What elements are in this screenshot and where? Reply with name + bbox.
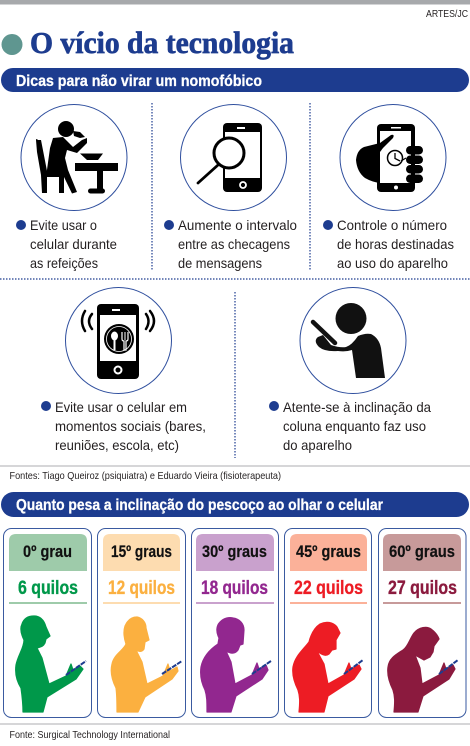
panel: 30 degrees: 18 quilos	[201, 577, 268, 599]
panel: tip interval	[164, 104, 297, 271]
text: coluna enquanto faz uso	[283, 418, 426, 434]
text	[178, 217, 297, 271]
icon: ringing phone with cutlery	[66, 288, 172, 394]
heading bar: tips: Dicas para não virar um nomofóbico	[16, 73, 262, 90]
text: Aumente o intervalo	[178, 217, 297, 233]
icon: hand holding phone with clock	[340, 104, 446, 210]
bullet	[164, 220, 174, 230]
panel: 45 degrees: 45º graus	[296, 543, 361, 561]
panel: 45 degrees: 22 quilos	[294, 577, 363, 599]
panel: 60 degrees: 27 quilos	[388, 577, 457, 599]
heading bar: neck weight: Quanto pesa a inclinação do pescoço ao olhar o celular	[16, 497, 383, 514]
figure: 45 degree tilt	[293, 622, 363, 712]
text: celular durante	[30, 236, 117, 252]
icon: magnifier on phone	[180, 104, 286, 210]
bullet	[41, 401, 51, 411]
text: Controle o número	[337, 217, 447, 233]
text: entre as checagens	[178, 236, 290, 252]
panel: 15 degrees: 15º graus	[111, 543, 172, 561]
panel: 30 degrees: 30º graus	[202, 543, 267, 561]
text	[30, 217, 117, 271]
panel: tip hours	[323, 104, 454, 271]
panel: 0 degrees	[4, 528, 92, 718]
text	[283, 399, 431, 453]
panel: 60 degrees	[378, 528, 466, 718]
panel: 45 degrees	[284, 528, 372, 718]
text	[55, 399, 206, 453]
figure: 60 degree tilt	[388, 627, 458, 712]
panel: 15 degrees	[98, 528, 186, 718]
source for neck weight: Fonte: Surgical Technology International	[10, 729, 170, 741]
bullet	[16, 220, 26, 230]
panel: 0 degrees: 0º grau	[23, 543, 72, 561]
title	[2, 25, 294, 60]
figure: 15 degree tilt	[111, 617, 182, 712]
text: reuniões, escola, etc)	[55, 437, 179, 453]
heading bar: tips	[1, 68, 469, 92]
panel: 30 degrees	[192, 528, 278, 718]
panel: 0 degrees: 6 quilos	[18, 577, 78, 599]
panel: tip posture	[269, 288, 431, 453]
heading bar: neck weight	[1, 492, 469, 517]
text: ao uso do aparelho	[337, 255, 448, 271]
text	[337, 217, 454, 271]
panel: tip meals	[16, 104, 127, 271]
sources for tips: Fontes: Tiago Queiroz (psiquiatra) e Eduardo Vieira (fisioterapeuta)	[10, 470, 281, 482]
panel: 60 degrees: 60º graus	[389, 543, 455, 561]
text: do aparelho	[283, 437, 352, 453]
figure: upright posture	[16, 616, 86, 712]
text: Atente-se à inclinação da	[283, 399, 431, 415]
bullet	[323, 220, 333, 230]
text: Evite usar o	[30, 217, 97, 233]
panel: tip social moments	[41, 288, 206, 453]
figure: 30 degree tilt	[201, 618, 271, 712]
text: momentos sociais (bares,	[55, 418, 206, 434]
text: as refeições	[30, 255, 98, 271]
icon: title dot	[2, 34, 22, 55]
panel: 15 degrees: 12 quilos	[108, 577, 175, 599]
title text: O vício da tecnologia	[30, 25, 294, 60]
icon: person eating	[21, 104, 127, 210]
bullet	[269, 401, 279, 411]
text: Evite usar o celular em	[55, 399, 187, 415]
icon: person bent over phone	[300, 288, 406, 394]
text: de mensagens	[178, 255, 262, 271]
text: de horas destinadas	[337, 236, 454, 252]
